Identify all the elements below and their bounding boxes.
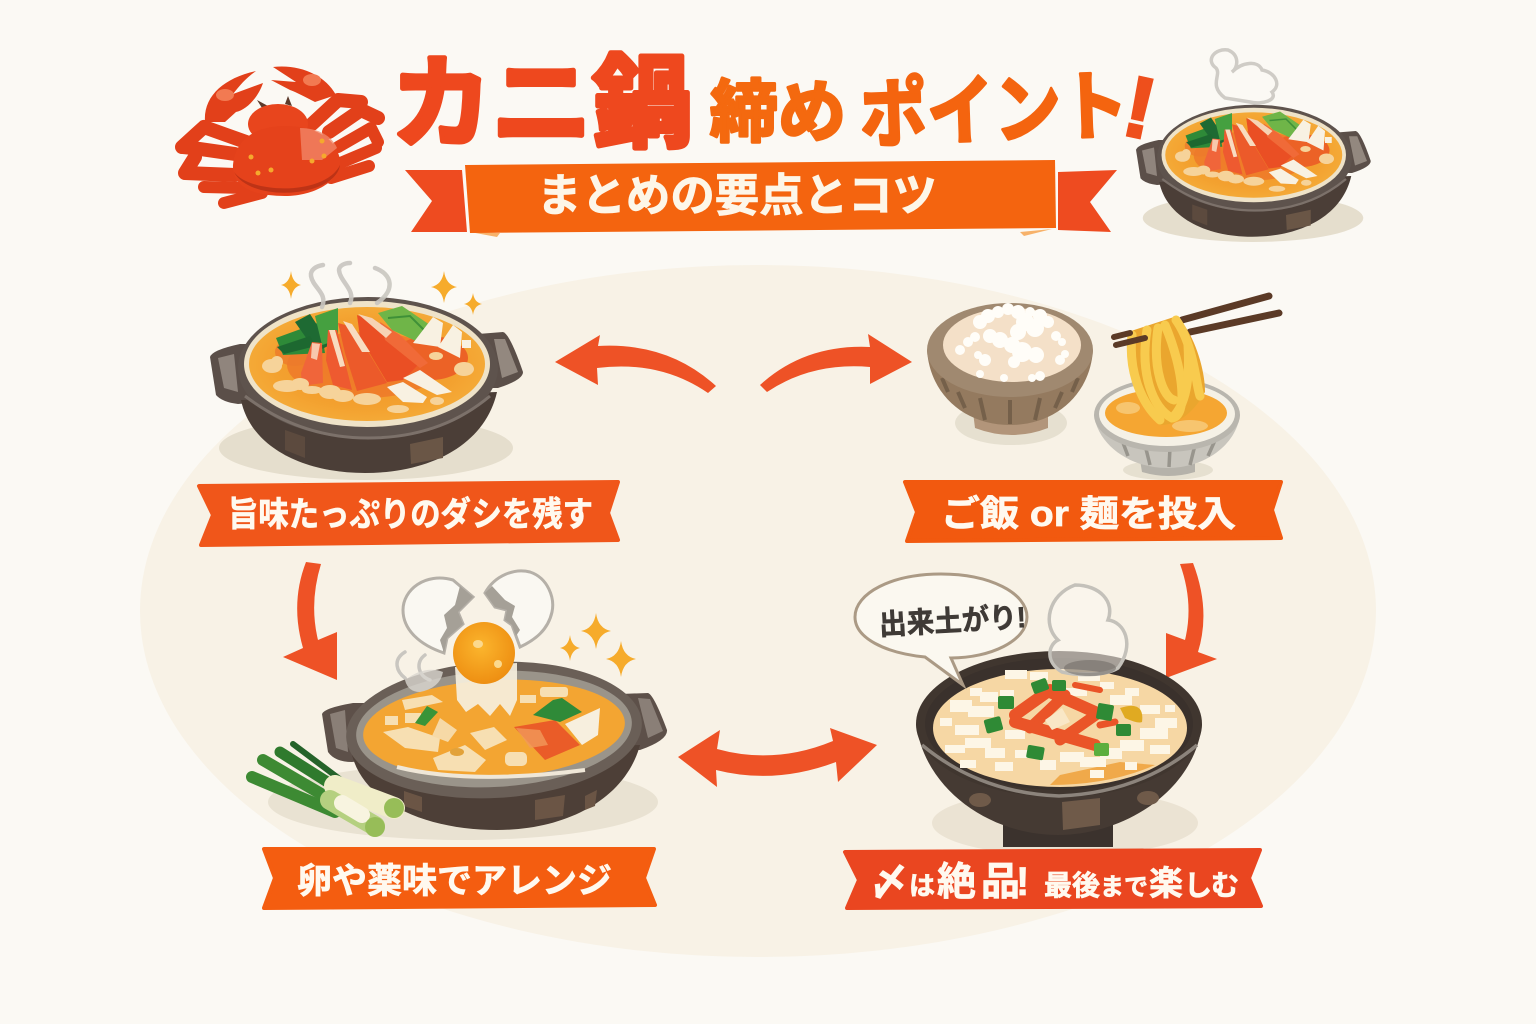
banner: step 3	[264, 849, 655, 908]
banner text: ご飯 or 麺を投入	[941, 493, 1236, 534]
icon: eggshell left	[403, 578, 473, 653]
icon: crab	[182, 67, 378, 203]
subtitle text: まとめの要点とコツ	[537, 170, 937, 221]
rice porridge	[933, 669, 1187, 787]
icon: noodle bowl	[1094, 378, 1240, 480]
icon: sparkles	[281, 271, 482, 315]
background ellipse	[140, 265, 1376, 957]
banner text: し	[1184, 870, 1212, 901]
icon: egg yolk	[453, 622, 515, 684]
title	[391, 49, 1164, 161]
icon: noodles	[1128, 316, 1205, 425]
icon: eggshell right	[485, 571, 553, 647]
step 3: pot with egg	[252, 571, 667, 840]
banner text: 卵や薬味でアレンジ	[297, 862, 612, 901]
banner text: 楽	[1149, 865, 1183, 903]
step 4: finished porridge	[855, 574, 1202, 856]
banner text: 旨味たっぷりのダシを残す	[228, 495, 593, 534]
icon: steam	[311, 263, 390, 307]
banner text: 〆	[870, 862, 908, 904]
arrow: left downward	[283, 562, 337, 680]
icon: rice bowl	[927, 303, 1093, 445]
banner text: で	[1124, 874, 1148, 901]
icon: stone bowl	[916, 651, 1202, 847]
speech bubble	[855, 574, 1027, 685]
title sub: points: ポイント	[859, 64, 1129, 159]
banner text: 最	[1044, 870, 1072, 901]
ribbon: subtitle	[405, 160, 1117, 237]
arrow: to left top	[555, 335, 716, 393]
banner text: ま	[1100, 874, 1124, 901]
banner: step 2	[905, 482, 1281, 541]
icon: egg white	[455, 663, 517, 716]
title exclamation: !	[1116, 58, 1164, 158]
icon: steam cloud	[1049, 585, 1127, 676]
bubble text: 出来土がり!	[878, 600, 1027, 642]
icon: clay pot	[322, 654, 667, 830]
arrow: right downward	[1166, 563, 1217, 678]
icon: chopsticks back	[1182, 296, 1279, 332]
banner text: 品	[981, 861, 1020, 904]
banner text: む	[1211, 870, 1239, 901]
green onion pieces	[983, 678, 1131, 760]
arrow: double headed bottom	[678, 728, 877, 787]
icon: chopsticks front	[1114, 333, 1145, 345]
icon: steam	[397, 652, 443, 692]
icon: sparkles	[560, 613, 636, 677]
step 1: hot pot	[210, 263, 523, 480]
title sub: finishing: 締め	[710, 75, 846, 151]
crab topping	[1015, 685, 1115, 745]
step 2: rice and noodles	[927, 296, 1279, 480]
banner: step 1	[199, 482, 618, 545]
banner text: 後	[1072, 870, 1100, 901]
banner: step 4	[845, 850, 1261, 908]
icon: top right hot pot	[1136, 50, 1371, 242]
arrow: to right top	[760, 334, 912, 392]
banner text: !	[1016, 860, 1029, 904]
banner text: 絶	[937, 861, 976, 904]
icon: green onions	[252, 744, 404, 837]
banner text: は	[909, 871, 935, 901]
title main: crab hot pot: カニ鍋	[391, 49, 693, 161]
